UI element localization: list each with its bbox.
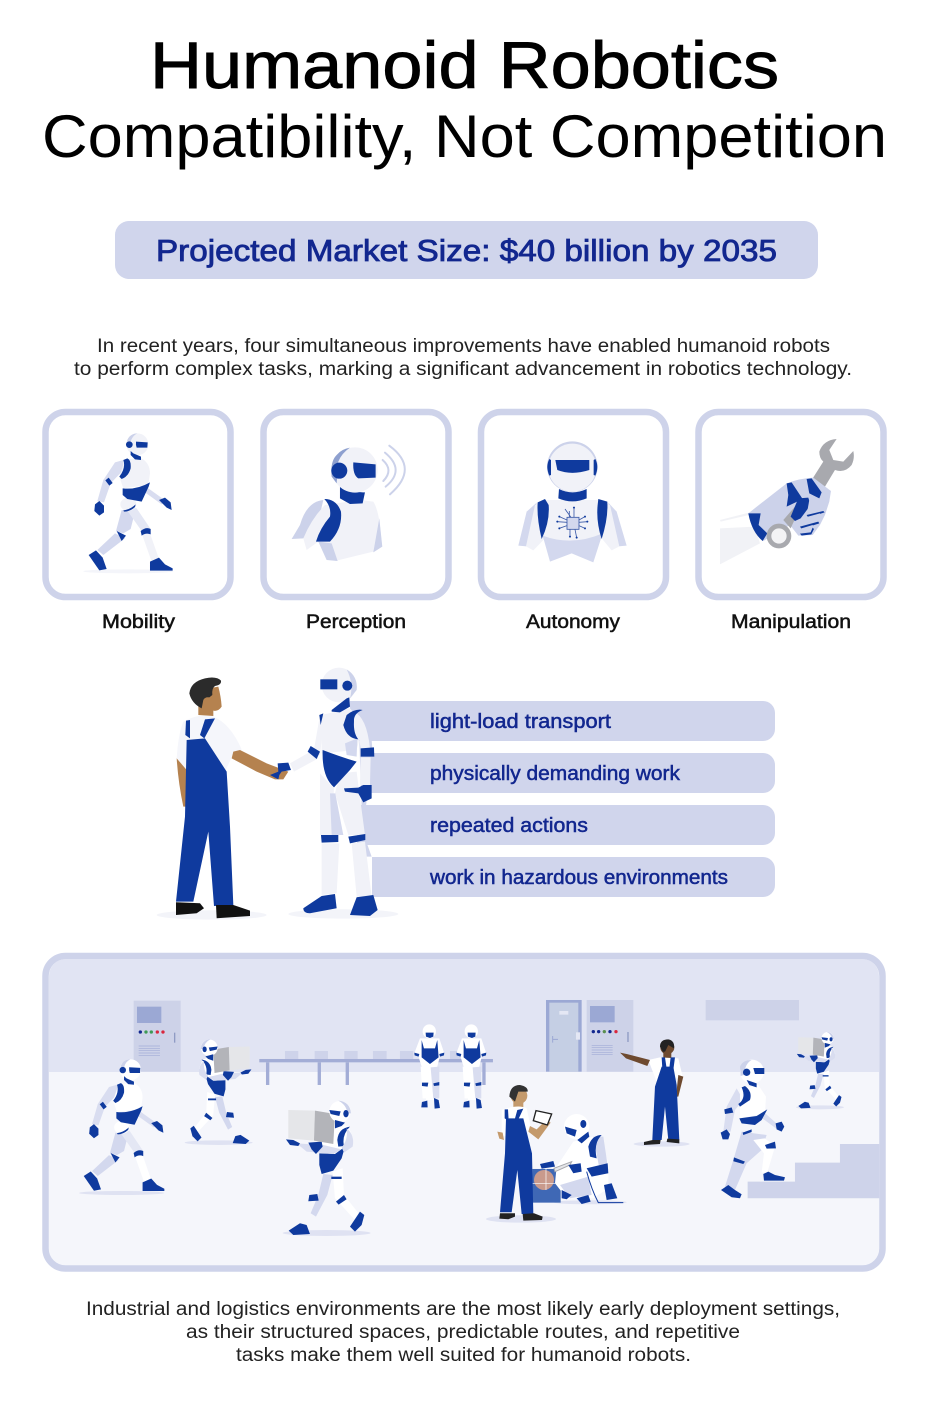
two standing robots (414, 1024, 486, 1109)
intro text: to perform complex tasks, marking a significant advancement in robotics technology. (74, 359, 852, 380)
task pills (350, 701, 775, 897)
worker with tablet (486, 1085, 556, 1223)
stairs (748, 1144, 879, 1198)
closing text: as their structured spaces, predictable routes, and repetitive (186, 1322, 740, 1343)
task pills: light-load transport (430, 711, 611, 733)
robot carrying box, left (185, 1039, 253, 1145)
panel: perception (264, 412, 448, 633)
closing text: Industrial and logistics environments are the most likely early deployment settings, (86, 1299, 840, 1320)
panel: autonomy (481, 412, 666, 633)
worker figure (176, 678, 288, 918)
market size banner: Projected Market Size: $40 billion by 2035 (156, 233, 777, 268)
door (546, 1000, 582, 1072)
task pills: repeated actions (430, 815, 588, 837)
icon: robot hand holding wrench (720, 439, 854, 564)
walking robot (79, 1059, 164, 1195)
panel: factory floor scene (46, 956, 882, 1268)
subtitle: Compatibility, Not Competition (42, 103, 887, 170)
kneeling robot repairing equipment (532, 1114, 627, 1204)
conveyor table (259, 1051, 493, 1085)
robot carrying box, far right (796, 1032, 844, 1109)
title: Humanoid Robotics (150, 28, 779, 102)
market size banner (115, 221, 818, 279)
background equipment, right half (546, 1000, 879, 1198)
icon: robot bust with sound waves (292, 446, 405, 561)
intro text: In recent years, four simultaneous improvements have enabled humanoid robots (97, 336, 830, 357)
task pills: work in hazardous environments (429, 867, 728, 889)
worker pointing at cabinet (620, 1039, 690, 1147)
illustration: human and robot handshake (157, 668, 398, 920)
intro text (74, 336, 852, 380)
wall sign (706, 1000, 799, 1020)
title (42, 28, 887, 170)
panel: mobility (46, 412, 230, 633)
background equipment, left half (134, 1001, 493, 1085)
control cabinet (587, 1000, 633, 1072)
label: perception: Perception (306, 612, 406, 633)
control cabinet (134, 1001, 181, 1072)
robot climbing stairs (721, 1060, 785, 1198)
icon: walking robot (83, 433, 173, 573)
robot figure (270, 668, 378, 916)
label: autonomy: Autonomy (526, 612, 621, 633)
label: manipulation: Manipulation (731, 612, 851, 633)
panel: manipulation (698, 412, 884, 633)
icon: robot with AI chip (518, 441, 627, 562)
task pills: physically demanding work (430, 763, 681, 785)
closing text: tasks make them well suited for humanoid robots. (236, 1345, 691, 1366)
label: mobility: Mobility (102, 612, 176, 633)
closing text (86, 1299, 840, 1366)
robot carrying box, centre (283, 1101, 371, 1236)
